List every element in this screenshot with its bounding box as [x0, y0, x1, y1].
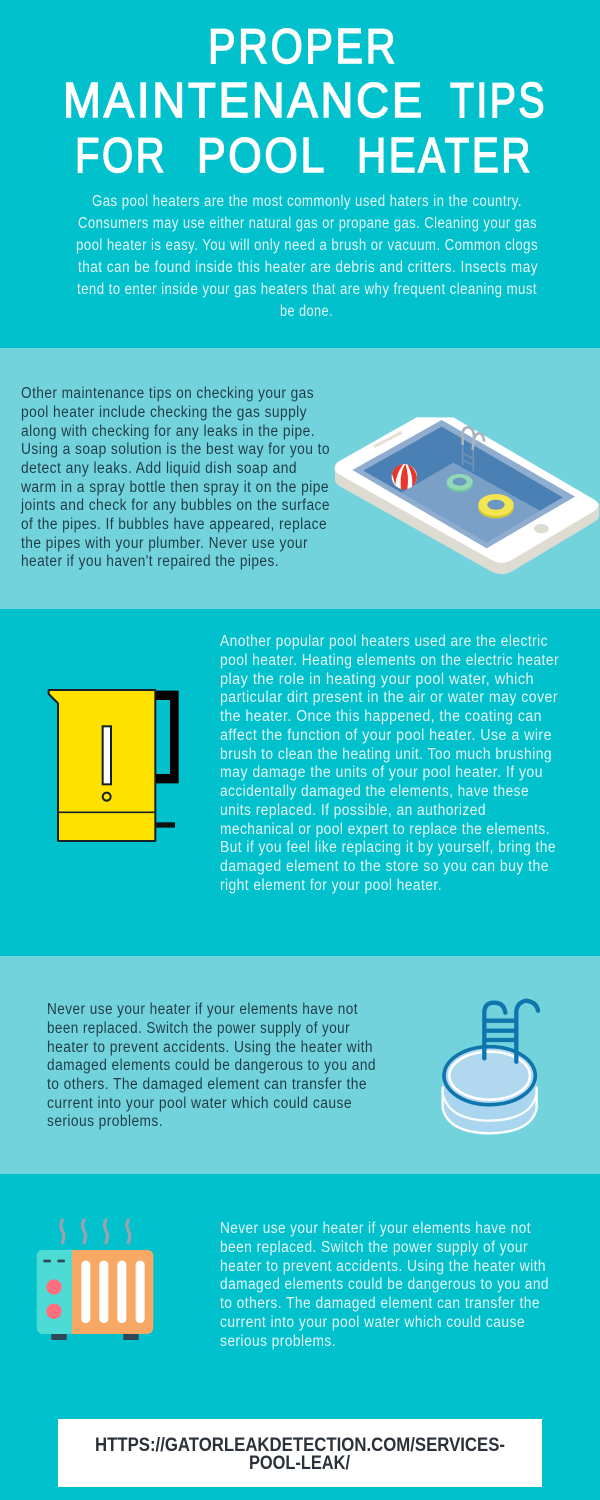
- power supply text: been replaced. Switch the power supply of your: [220, 1239, 528, 1256]
- title: MAINTENANCE: [63, 74, 425, 128]
- icon: tablet pool illustration: [334, 417, 599, 574]
- warning text: been replaced. Switch the power supply of your: [47, 1020, 350, 1037]
- intro text: tend to enter inside your gas heaters that are why frequent cleaning must: [77, 281, 537, 298]
- electric heater text: affect the function of your pool heater. Use a wire: [220, 727, 552, 744]
- gas supply text: the pipes with your plumber. Never use your: [21, 535, 308, 552]
- panel: electric heater tips: [49, 633, 559, 894]
- electric heater text: [220, 633, 559, 894]
- electric heater text: may damage the units of your pool heater. If you: [220, 764, 543, 781]
- beach ball: [392, 464, 417, 489]
- warning text: damaged elements could be dangerous to you and: [47, 1057, 376, 1074]
- electric heater text: particular dirt present in the air or water may cover: [220, 689, 558, 706]
- warning text: serious problems.: [47, 1113, 163, 1130]
- panel: damaged elements warning: [0, 956, 600, 1174]
- title: FOR: [75, 129, 167, 183]
- power supply text: Never use your heater if your elements have not: [220, 1220, 531, 1237]
- warning text: to others. The damaged element can transfer the: [47, 1076, 367, 1093]
- intro text: that can be found inside this heater are debris and critters. Insects may: [78, 259, 538, 276]
- icon: space heater: [37, 1220, 153, 1340]
- gas supply text: along with checking for any leaks in the pipe.: [21, 423, 315, 440]
- gas supply text: [20, 385, 330, 570]
- yellow ring: [478, 494, 514, 518]
- title: [63, 20, 547, 183]
- electric heater text: But if you feel like replacing it by yourself, bring the: [220, 839, 556, 856]
- electric heater text: right element for your pool heater.: [220, 877, 442, 894]
- ladder: [463, 427, 484, 472]
- warning text: heater to prevent accidents. Using the heater with: [47, 1039, 373, 1056]
- icon: yellow kettle: [49, 690, 179, 841]
- power supply text: heater to prevent accidents. Using the heater with: [220, 1258, 546, 1275]
- intro text: Gas pool heaters are the most commonly used haters in the country.: [92, 193, 522, 210]
- panel: power supply warning: [37, 1220, 549, 1350]
- power supply text: damaged elements could be dangerous to you and: [220, 1276, 549, 1293]
- gas supply text: Using a soap solution is the best way for you to: [21, 441, 330, 458]
- gas supply text: joints and check for any bubbles on the surface: [20, 497, 330, 514]
- title: PROPER: [208, 20, 398, 74]
- electric heater text: play the role in heating your pool water, which: [220, 671, 534, 688]
- footer link box: [58, 1419, 542, 1487]
- electric heater text: the heater. Once this happened, the coating can: [220, 708, 542, 725]
- warning text: current into your pool water which could cause: [47, 1095, 352, 1112]
- footer link box: POOL-LEAK/: [249, 1452, 350, 1474]
- electric heater text: accidentally damaged the elements, have these: [220, 783, 529, 800]
- gas supply text: heater if you haven't repaired the pipes.: [21, 553, 279, 570]
- warning text: [47, 1001, 376, 1130]
- intro text: be done.: [280, 303, 333, 320]
- power supply text: [220, 1220, 549, 1350]
- gas supply text: Other maintenance tips on checking your gas: [21, 385, 314, 402]
- title: HEATER: [357, 129, 533, 183]
- power supply text: to others. The damaged element can transfer the: [220, 1295, 540, 1312]
- gas supply text: detect any leaks. Add liquid dish soap and: [21, 460, 297, 477]
- electric heater text: units replaced. If possible, an authorized: [220, 802, 486, 819]
- gas supply text: warm in a spray bottle then spray it on the pipe: [20, 479, 329, 496]
- panel: gas supply tips: [0, 348, 600, 609]
- footer link box: HTTPS://GATORLEAKDETECTION.COM/SERVICES-: [95, 1434, 505, 1456]
- electric heater text: brush to clean the heating unit. Too much brushing: [220, 746, 552, 763]
- power supply text: serious problems.: [220, 1333, 336, 1350]
- power supply text: current into your pool water which could cause: [220, 1314, 525, 1331]
- intro text: [76, 193, 538, 320]
- electric heater text: Another popular pool heaters used are the electric: [220, 633, 548, 650]
- warning text: Never use your heater if your elements have not: [47, 1001, 358, 1018]
- gas supply text: of the pipes. If bubbles have appeared, replace: [21, 516, 327, 533]
- gas supply text: pool heater include checking the gas supply: [21, 404, 307, 421]
- electric heater text: damaged element to the store so you can buy the: [220, 858, 549, 875]
- electric heater text: mechanical or pool expert to replace the elements.: [220, 821, 550, 838]
- green ring: [447, 474, 473, 492]
- title: POOL: [197, 129, 327, 183]
- icon: round pool with ladder: [443, 1001, 538, 1134]
- title: TIPS: [450, 74, 547, 128]
- electric heater text: pool heater. Heating elements on the electric heater: [220, 652, 559, 669]
